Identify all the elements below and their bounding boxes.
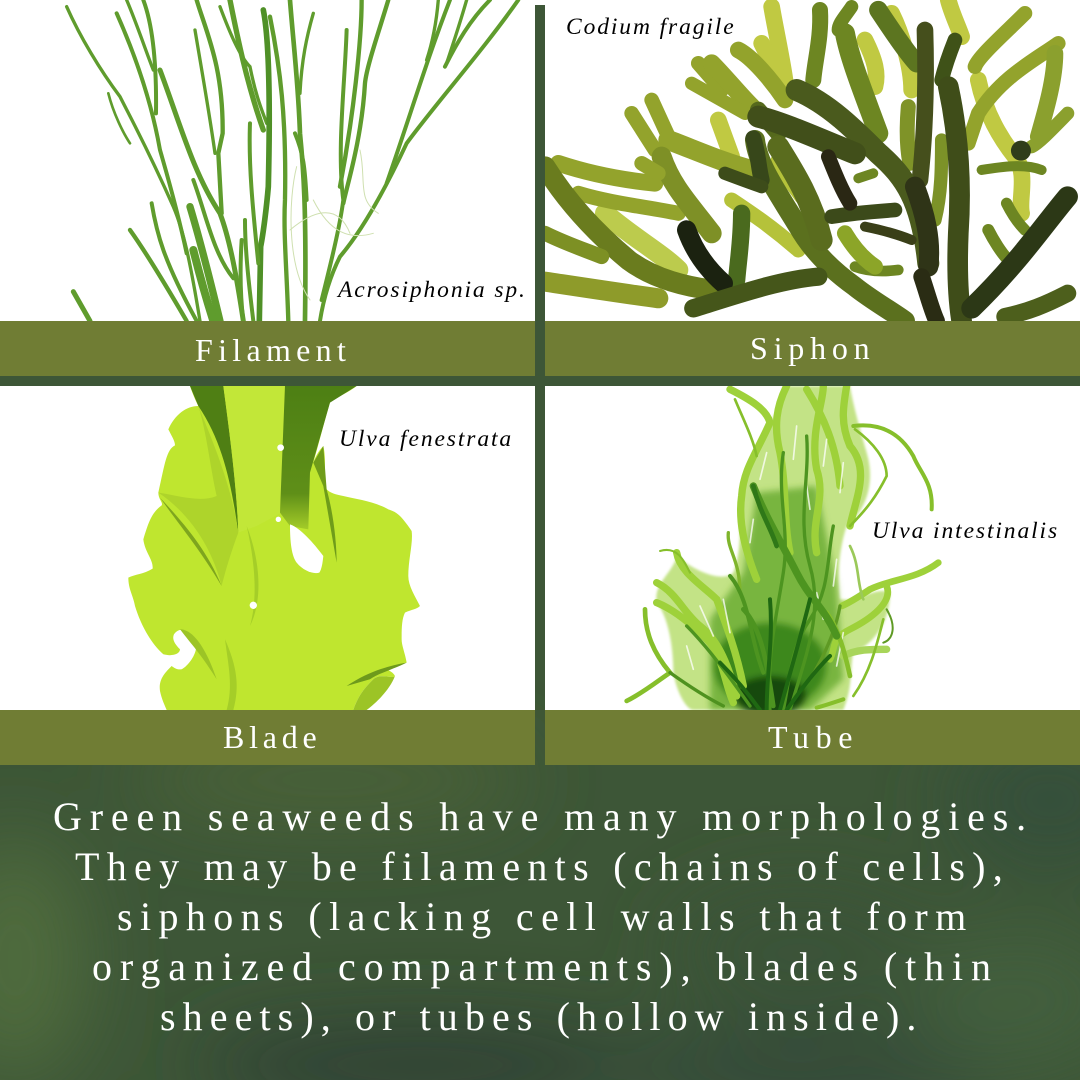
text block: description: Green seaweeds have many morphologies. [53,794,1034,839]
text block: description: They may be filaments (chains of cells), [75,844,1010,889]
panel: blade [0,386,535,710]
text block: description: sheets), or tubes (hollow inside). [160,994,924,1039]
label bar: Blade: Blade [223,719,321,755]
panel: siphon [545,0,1080,321]
label bar: Siphon: Siphon [750,330,876,366]
species label: Ulva fenestrata [339,426,513,452]
species label: Ulva intestinalis [872,518,1059,544]
illustration: Ulva intestinalis [624,386,942,710]
label bar: Tube: Tube [768,719,859,755]
label bar: Blade [0,710,535,765]
label bar: Filament: Filament [195,332,351,368]
illustration: Ulva fenestrata [128,386,420,710]
species label: Acrosiphonia sp. [338,277,527,303]
text block: description [53,794,1034,1039]
white strip above divider [535,0,545,5]
text block: description: siphons (lacking cell walls that form [117,894,974,939]
panel: filament [0,0,535,321]
panel: tube [545,386,1080,710]
label bar: Siphon [545,321,1080,376]
label bar: Filament [0,321,535,376]
text block: description: organized compartments), blades (thin [92,944,999,989]
illustration: Acrosiphonia filaments [64,0,520,321]
species label: Codium fragile [566,14,736,40]
illustration: Codium fragile [545,0,1078,321]
label bar: Tube [545,710,1080,765]
